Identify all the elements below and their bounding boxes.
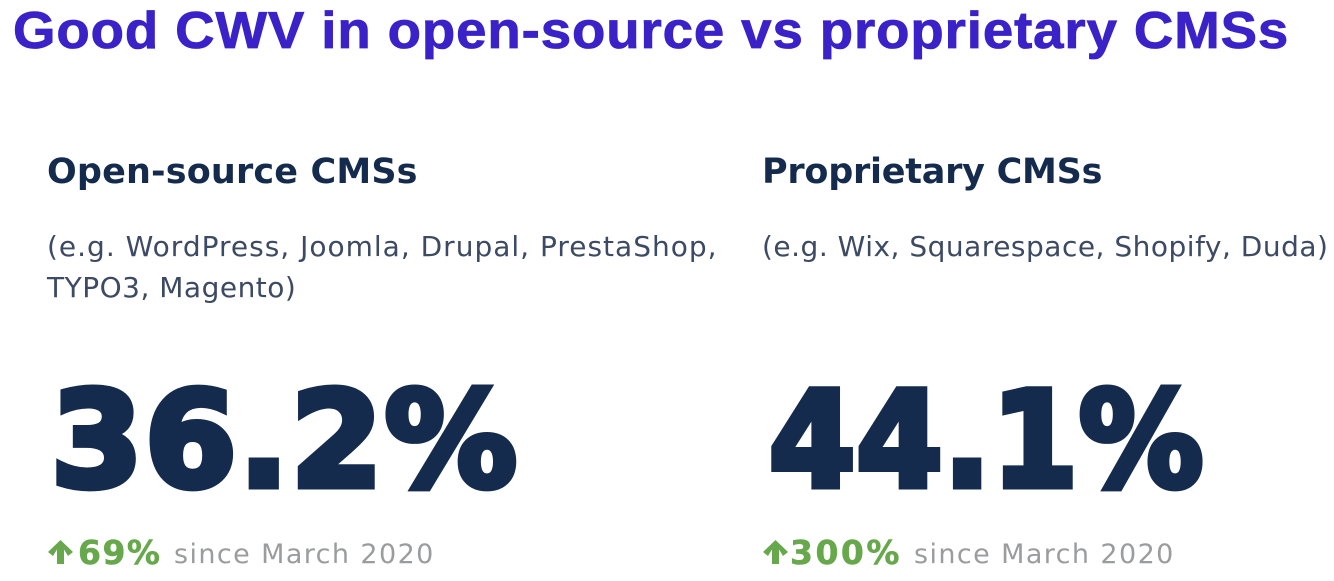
change: 300%: 300% (790, 533, 902, 572)
examples: open-source: (e.g. WordPress, Joomla, Drupal, PrestaShop, (47, 230, 718, 263)
period: since March 2020: since March 2020 (174, 539, 435, 570)
period: since March 2020: since March 2020 (914, 539, 1175, 570)
stat: 44.1%: 44.1% (769, 364, 1204, 518)
icon: green up arrow (48, 540, 73, 564)
heading: proprietary: Proprietary CMSs (762, 152, 1102, 192)
examples: proprietary: (e.g. Wix, Squarespace, Shopify, Duda) (762, 230, 1328, 263)
examples: open-source: TYPO3, Magento) (47, 271, 296, 304)
panel: proprietary CMSs (762, 152, 1328, 572)
icon: green up arrow (763, 540, 788, 564)
title: Good CWV in open-source vs proprietary CMSs (13, 2, 1289, 60)
heading: open-source: Open-source CMSs (47, 152, 418, 192)
stat: 36.2%: 36.2% (51, 364, 519, 518)
change: 69%: 69% (78, 533, 162, 572)
examples: open-source (46, 230, 718, 304)
panel: open-source CMSs (46, 152, 718, 572)
